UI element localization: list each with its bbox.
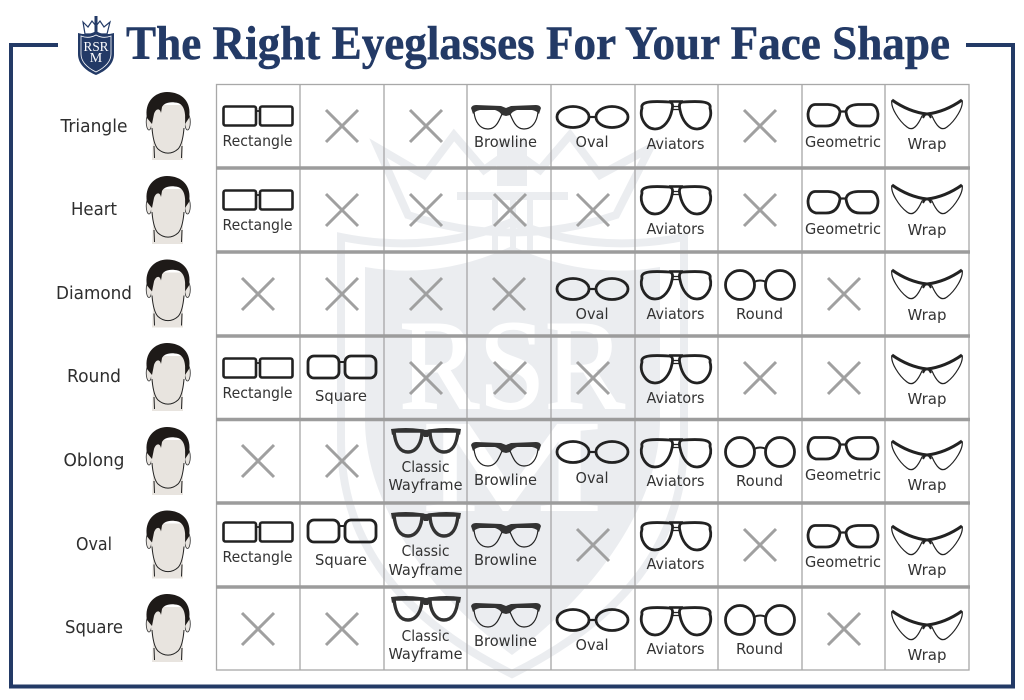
cell: Wrap: Wrap: [908, 561, 946, 579]
cross: [828, 278, 860, 310]
cell: Square: Square: [315, 387, 367, 405]
cell: Browline: [471, 523, 541, 569]
cross: [744, 362, 776, 394]
cell: Classic Wayframe: [388, 512, 462, 579]
cell: Aviators: [641, 186, 711, 238]
watermark shield outline: [341, 222, 684, 674]
logo: RSM crest: RSR: [84, 40, 109, 55]
cell: Aviators: Aviators: [646, 389, 705, 407]
cell: Geometric: [805, 438, 881, 484]
cell: Aviators: [641, 272, 711, 323]
cell: Wrap: [892, 270, 962, 324]
cell: Wrap: [892, 100, 962, 153]
row: Triangle: [60, 92, 962, 160]
cross: [326, 613, 358, 645]
cross: [242, 613, 274, 645]
row: Heart: [71, 176, 962, 244]
watermark letters: M: [422, 395, 602, 539]
face: Oval: [146, 510, 190, 578]
cell: Geometric: [805, 526, 881, 571]
cross: [744, 110, 776, 142]
cell: Round: [726, 270, 794, 323]
cell: Aviators: [641, 356, 711, 407]
cell: Wrap: Wrap: [908, 646, 946, 664]
watermark letters: [400, 296, 625, 539]
cross: [494, 362, 526, 394]
cell: Round: [726, 606, 794, 658]
cell: Wrap: Wrap: [908, 221, 946, 239]
cross: [410, 278, 442, 310]
cross: [577, 529, 609, 561]
cross: [326, 278, 358, 310]
cross: [577, 362, 609, 394]
cell: Square: [308, 520, 376, 569]
cross: [410, 194, 442, 226]
watermark shield fill: [365, 246, 660, 655]
cell: Browline: [471, 442, 541, 489]
cell: Classic Wayframe: [388, 596, 462, 663]
cell: Oval: Oval: [576, 305, 608, 323]
cell: Wrap: [892, 355, 962, 408]
row label: Heart: Heart: [71, 199, 117, 220]
cell: Classic Wayframe: [388, 428, 462, 494]
row: Oblong: [64, 427, 962, 495]
cell: Aviators: Aviators: [646, 305, 705, 323]
title: The Right Eyeglasses For Your Face Shape: [126, 17, 950, 70]
cell: Rectangle: Rectangle: [222, 132, 292, 150]
cell: Aviators: Aviators: [646, 220, 705, 238]
row label: Round: Round: [67, 366, 121, 387]
cell: Aviators: Aviators: [646, 640, 705, 658]
row label: Triangle: Triangle: [60, 116, 128, 137]
row: Round: [67, 343, 962, 411]
cell: Browline: Browline: [474, 551, 537, 569]
cell: Rectangle: [222, 522, 292, 566]
cell: Aviators: Aviators: [646, 135, 705, 153]
cross: [744, 194, 776, 226]
cell: Round: Round: [736, 472, 783, 490]
row: Diamond: [56, 260, 962, 328]
cell: Rectangle: Rectangle: [222, 216, 292, 234]
cross: [242, 278, 274, 310]
row: Oval: [76, 510, 962, 579]
cell: Oval: Oval: [576, 133, 608, 151]
cell: Geometric: Geometric: [805, 466, 881, 484]
cell: Aviators: [641, 440, 711, 490]
cross: [494, 194, 526, 226]
face: Square: [146, 594, 190, 662]
cell: Aviators: Aviators: [646, 472, 705, 490]
cell: Square: [308, 356, 376, 405]
cell: Rectangle: [222, 190, 292, 234]
cross: [326, 445, 358, 477]
cell: Wrap: Wrap: [908, 306, 946, 324]
cell: Rectangle: [222, 358, 292, 402]
row label: Square: Square: [65, 617, 123, 638]
cell: Wrap: Wrap: [908, 476, 946, 494]
cell: Classic Wayframe: Wayframe: [388, 645, 462, 663]
logo: RSM crest: M: [90, 51, 103, 66]
cell: Wrap: [892, 441, 962, 494]
cell: Rectangle: Rectangle: [222, 548, 292, 566]
cross: [326, 110, 358, 142]
cell: Round: Round: [736, 640, 783, 658]
cell: Wrap: Wrap: [908, 135, 946, 153]
cell: Aviators: [641, 522, 711, 573]
cell: Classic Wayframe: Classic: [402, 542, 450, 560]
cell: Aviators: [641, 102, 711, 153]
logo: RSM crest: [78, 16, 114, 75]
cross: [744, 529, 776, 561]
cell: Round: [726, 438, 794, 490]
cell: Wrap: [892, 526, 962, 579]
cross: [493, 278, 525, 310]
cell: Classic Wayframe: Classic: [402, 458, 450, 476]
face: Round: [146, 343, 190, 411]
cell: Oval: [557, 442, 628, 487]
cross: [326, 194, 358, 226]
cell: Browline: Browline: [474, 133, 537, 151]
row label: Oval: Oval: [76, 534, 112, 555]
cell: Round: Round: [736, 305, 783, 323]
face: Triangle: [146, 92, 190, 160]
cell: Rectangle: Rectangle: [222, 384, 292, 402]
cell: Browline: Browline: [474, 471, 537, 489]
cross: [242, 445, 274, 477]
cell: Geometric: Geometric: [805, 220, 881, 238]
cell: Geometric: Geometric: [805, 133, 881, 151]
cell: Oval: [557, 106, 628, 151]
cell: Classic Wayframe: Wayframe: [388, 561, 462, 579]
cell: Geometric: [805, 104, 881, 151]
row label: Oblong: Oblong: [64, 450, 124, 471]
table grid: [216, 84, 970, 670]
cross: [828, 362, 860, 394]
cell: Wrap: [892, 611, 962, 664]
watermark letters: RSR: [400, 296, 625, 436]
watermark sword: [457, 140, 568, 250]
cell: Classic Wayframe: Wayframe: [388, 476, 462, 494]
watermark crown: [378, 135, 650, 232]
cell: Classic Wayframe: Classic: [402, 627, 450, 645]
cell: Aviators: [641, 608, 711, 658]
cell: Square: Square: [315, 551, 367, 569]
row label: Diamond: Diamond: [56, 283, 132, 304]
face: Oblong: [146, 427, 190, 495]
cell: Wrap: [892, 185, 962, 239]
cell: Oval: [557, 610, 628, 654]
watermark: RSM crest: [341, 135, 684, 674]
cross: [410, 110, 442, 142]
face: Heart: [146, 176, 190, 244]
face: Diamond: [146, 260, 190, 328]
row: Square: [65, 594, 962, 664]
cell: Browline: Browline: [474, 632, 537, 650]
cell: Browline: [471, 105, 541, 151]
cell: Browline: [471, 603, 541, 650]
cell: Oval: Oval: [576, 469, 608, 487]
cell: Wrap: Wrap: [908, 390, 946, 408]
cell: Oval: [557, 278, 628, 323]
cross: [577, 194, 609, 226]
cell: Oval: Oval: [576, 636, 608, 654]
cell: Geometric: [805, 192, 881, 238]
cell: Geometric: Geometric: [805, 553, 881, 571]
cell: Rectangle: [222, 106, 292, 150]
cross: [828, 613, 860, 645]
cross: [410, 362, 442, 394]
cell: Aviators: Aviators: [646, 555, 705, 573]
